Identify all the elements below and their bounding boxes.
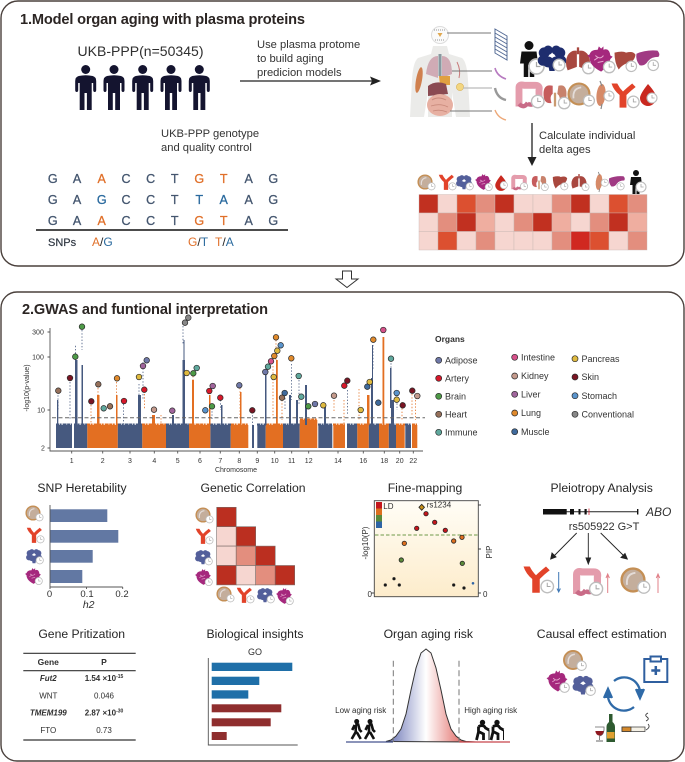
- table rows: 0.73: [96, 726, 112, 735]
- sequence alignment: A: [220, 193, 229, 207]
- legend: organs: Heart: [445, 410, 468, 420]
- chromosome labels: 16: [359, 458, 367, 465]
- sequence alignment: G: [48, 172, 58, 186]
- legend: organs: Artery: [445, 374, 470, 384]
- axes: [50, 505, 123, 589]
- legend: organs: Skin: [582, 372, 599, 382]
- panel: gene prioritization: [23, 627, 136, 740]
- chromosome labels: 11: [288, 458, 295, 465]
- organ icons grid: [519, 41, 659, 109]
- icon: elderly people: [476, 720, 504, 740]
- icon: wine and bottle: [595, 714, 615, 742]
- chromosome labels: Chromosome: [215, 467, 257, 474]
- y axis labels: -log10(p-value): [24, 364, 31, 412]
- table rows: [30, 674, 124, 735]
- chromosome labels: 8: [237, 458, 241, 465]
- text: calculate delta ages: delta ages: [539, 144, 591, 156]
- tick labels: 0.2: [115, 589, 129, 600]
- legend: organs: Muscle: [521, 427, 550, 437]
- sequence alignment: G: [48, 214, 58, 228]
- chromosome labels: 5: [176, 458, 180, 465]
- label: high aging risk: High aging risk: [464, 706, 518, 715]
- legend: organs: Brain: [445, 392, 466, 402]
- legend: organs: Pancreas: [582, 354, 620, 364]
- y axis labels: [24, 330, 45, 452]
- legend: organs: Stomach: [582, 391, 617, 401]
- sequence alignment: T/A: [215, 235, 234, 249]
- y axis labels: 100: [32, 354, 44, 362]
- label: low aging risk: Low aging risk: [335, 706, 387, 715]
- sequence alignment: T: [195, 193, 203, 207]
- panel: organ aging risk: [335, 627, 518, 742]
- chromosome labels: 10: [271, 458, 279, 465]
- y axis labels: 2: [41, 446, 45, 452]
- sequence alignment: G/T: [188, 235, 209, 249]
- table rows: 1.54 ×10: [85, 674, 116, 683]
- heatmap icons: [418, 170, 646, 194]
- arrow: section connector: [336, 271, 358, 288]
- panel: genetic correlation: [195, 481, 306, 605]
- sequence alignment: G: [97, 193, 107, 207]
- sequence alignment: [36, 172, 288, 249]
- legend: organs: Liver: [521, 390, 541, 400]
- sequence alignment: T: [171, 214, 179, 228]
- sequence alignment: T: [171, 172, 179, 186]
- chromosome labels: 6: [198, 458, 202, 465]
- gene model: [543, 508, 638, 515]
- axis labels: 0: [368, 590, 372, 599]
- LD legend: LD: [383, 502, 394, 511]
- chromosome blocks: [56, 420, 417, 448]
- arrows: [551, 533, 627, 564]
- panel: fine-mapping: [361, 481, 494, 599]
- axis labels: [361, 526, 494, 599]
- chromosome labels: 14: [334, 458, 342, 465]
- label: GO: GO: [248, 647, 262, 657]
- heading: Causal effect estimation: [537, 627, 667, 641]
- chromosome labels: 20: [396, 458, 404, 465]
- axis label: h2: [83, 599, 95, 611]
- icon: cycle arrows: [604, 677, 644, 711]
- text: plasma proteome description: to build aging: [257, 53, 324, 65]
- threshold line: [52, 417, 425, 419]
- chromosome labels: 2: [101, 458, 105, 465]
- table rows: TMEM199: [30, 708, 67, 718]
- panel: biological insights: [207, 627, 303, 745]
- text: cohort label: UKB-PPP(n=50345): [78, 43, 204, 59]
- legend: organs: Intestine: [521, 352, 555, 362]
- manhattan plot: [24, 315, 425, 474]
- legend: organs: Immune: [445, 428, 478, 438]
- label: rs505922: rs505922 G>T: [569, 521, 640, 533]
- body diagram: [410, 26, 507, 120]
- heading: Organ aging risk: [384, 627, 474, 641]
- legend: organs: Organs: [435, 334, 465, 344]
- sequence alignment: G: [268, 172, 278, 186]
- panel: pleiotropy analysis: [524, 481, 671, 595]
- sequence alignment: C: [146, 193, 155, 207]
- y axis labels: 10: [37, 408, 45, 414]
- icon: clipboard: [644, 656, 667, 682]
- organ icons: [195, 508, 293, 605]
- text: plasma proteome description: Use plasma protome: [257, 39, 360, 51]
- sequence alignment: SNPs: [48, 237, 77, 249]
- tick labels: 0: [47, 589, 52, 600]
- table rows: Fut2: [40, 674, 57, 683]
- table rows: -30: [116, 708, 124, 714]
- threshold: [375, 534, 478, 536]
- heatmap: [419, 194, 647, 250]
- legend: organs: Kidney: [521, 371, 549, 381]
- table rows: FTO: [40, 726, 56, 735]
- label: lead SNP: rs1234: [427, 500, 452, 510]
- sequence alignment: G: [194, 172, 204, 186]
- sequence alignment: T: [220, 214, 228, 228]
- sequence alignment: G: [194, 214, 204, 228]
- table header: Gene: [38, 657, 59, 667]
- chromosome labels: [70, 458, 417, 474]
- chromosome labels: 3: [128, 458, 132, 465]
- heading: section 2: 2.GWAS and funtional interpretation: [22, 302, 268, 318]
- sequence alignment: A: [245, 193, 254, 207]
- sequence alignment: A: [245, 172, 254, 186]
- sequence alignment: T: [220, 172, 228, 186]
- sequence alignment: A: [245, 214, 254, 228]
- heading: SNP Heretability: [37, 481, 127, 495]
- triangular heatmap: [217, 507, 295, 585]
- heading: Biological insights: [207, 627, 303, 641]
- organ markers: [56, 315, 420, 414]
- label: ABO: ABO: [645, 505, 671, 519]
- text: genotype QC: and quality control: [161, 142, 252, 154]
- sequence alignment: A: [73, 214, 82, 228]
- bars: [50, 509, 118, 583]
- legend: organs: Conventional: [582, 410, 634, 420]
- chromosome labels: 12: [305, 458, 313, 465]
- sequence alignment: C: [146, 214, 155, 228]
- bars: [212, 663, 292, 740]
- distribution curve: [346, 649, 510, 742]
- text: plasma proteome description: predicion models: [257, 67, 342, 79]
- sequence alignment: A: [98, 214, 107, 228]
- axis labels: -log10(P): [361, 526, 370, 559]
- sequence alignment: A: [73, 172, 82, 186]
- axis labels: PIP: [485, 546, 494, 558]
- table rows: -15: [116, 674, 124, 680]
- sequence alignment: A: [98, 172, 107, 186]
- chromosome labels: 1: [70, 458, 74, 465]
- table rows: WNT: [39, 692, 58, 700]
- organ outcomes: [524, 566, 660, 595]
- y axis labels: 300: [32, 330, 44, 336]
- heading: Genetic Correlation: [200, 481, 306, 495]
- panel: model organ aging: [1, 1, 684, 266]
- sequence alignment: T: [171, 193, 179, 207]
- chromosome labels: 22: [409, 458, 417, 465]
- plot area: [374, 501, 478, 597]
- table rows: 0.046: [94, 692, 115, 700]
- icon: cigarette: [622, 713, 649, 732]
- table rows: 2.87 ×10: [85, 708, 116, 718]
- sequence alignment: A: [73, 193, 82, 207]
- sequence alignment: C: [121, 193, 131, 207]
- chromosome labels: 4: [152, 458, 156, 465]
- heading: Pleiotropy Analysis: [551, 481, 653, 495]
- sequence alignment: C: [146, 172, 155, 186]
- axis labels: 0: [483, 590, 488, 599]
- legend: organs: [435, 334, 634, 438]
- axes: [48, 328, 423, 454]
- legend: organs: Lung: [521, 408, 541, 418]
- panel: GWAS and functional interpretation: [1, 292, 684, 761]
- chromosome labels: 18: [380, 458, 388, 465]
- heading: Fine-mapping: [388, 481, 462, 495]
- tick labels: 0.1: [80, 589, 94, 600]
- heading: Gene Pritization: [38, 627, 125, 641]
- arrow: calculate delta ages: [528, 123, 536, 166]
- points: [384, 504, 474, 589]
- sequence alignment: G: [268, 214, 278, 228]
- table rules: [23, 653, 136, 740]
- sequence alignment: G: [268, 193, 278, 207]
- legend: organs: Adipose: [445, 356, 478, 366]
- heading: section 1: 1.Model organ aging with plasma proteins: [20, 12, 305, 28]
- sequence alignment: G: [48, 193, 58, 207]
- chromosome labels: 7: [218, 458, 222, 465]
- icon: walkers: [352, 719, 375, 739]
- icon: five people: [75, 65, 210, 110]
- chromosome labels: 9: [255, 458, 259, 465]
- axis ticks: [372, 505, 481, 593]
- organ icons: [547, 651, 595, 695]
- axes: [208, 658, 298, 745]
- arrow: to body diagram: [240, 76, 381, 86]
- significant peaks: [57, 326, 416, 426]
- sequence alignment: C: [121, 172, 131, 186]
- organ icons: [25, 506, 44, 585]
- panel: causal effect estimation: [537, 627, 667, 742]
- text: calculate delta ages: Calculate individual: [539, 130, 635, 142]
- table header: P: [101, 657, 107, 667]
- text: genotype QC: UKB-PPP genotype: [161, 128, 259, 140]
- risk thresholds: [393, 661, 459, 742]
- sequence alignment: A/G: [92, 235, 113, 249]
- panel: SNP heritability: [25, 481, 129, 611]
- sequence alignment: C: [121, 214, 131, 228]
